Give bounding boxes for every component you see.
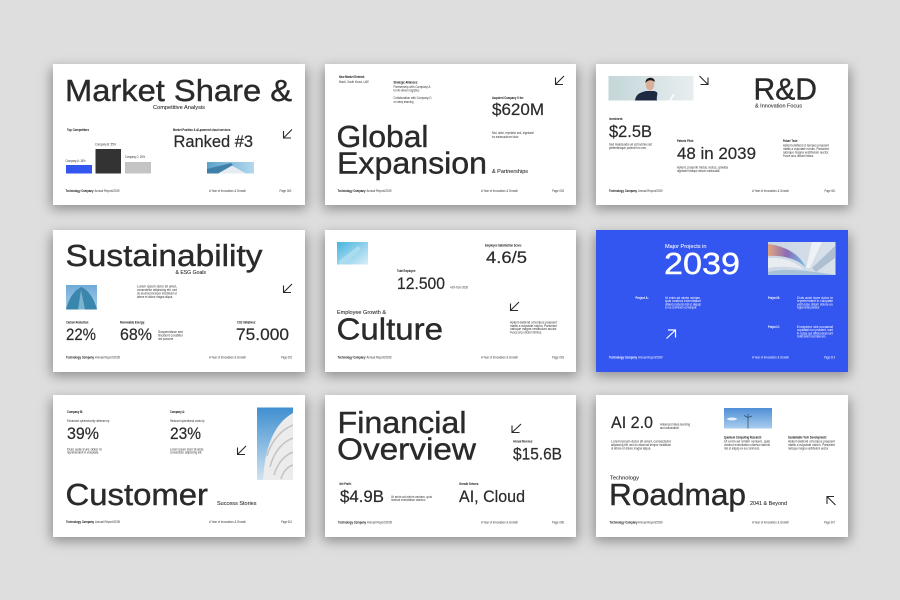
stat: acquisition: $620M <box>492 101 544 119</box>
stat: company A <box>170 410 205 454</box>
panel: financial overview slide <box>325 395 576 537</box>
stat: renewable energy: 68% <box>120 326 152 344</box>
text block: intro: labore et dolore magna aliqua. <box>137 295 173 299</box>
footer: Technology Company <box>338 356 366 360</box>
stat: satisfaction <box>485 244 527 267</box>
stat: CO2 initiatives: CO2 Initiatives: <box>237 320 256 324</box>
title: sustainability: Sustainability <box>66 239 263 273</box>
footer: Annual Report/2039 <box>638 356 663 360</box>
stat: acquisition: Nisi, dolor, repetatur sed, dignissim <box>492 131 534 135</box>
stat: company B: Duis aute irure dolor in <box>67 448 102 452</box>
footer: Page 006 <box>552 520 564 524</box>
stat: acquisition: leo malesuada sed dolor. <box>492 135 519 139</box>
text block: culture body <box>510 320 557 334</box>
footer <box>338 189 564 193</box>
stat: net profit: Net Profit: <box>340 482 352 486</box>
title: global expansion: Global <box>336 120 428 154</box>
footer: Annual Report/2039 <box>638 189 663 193</box>
stat: total employees: +8% from 2030 <box>450 286 468 290</box>
stat: carbon reduction: 22% <box>66 326 96 344</box>
stat: total employees: Total Employee: <box>397 269 416 273</box>
stat: company A: consectetur adipiscing elit. <box>170 450 202 454</box>
block: project C: Excepteur sint occaecat <box>797 325 833 329</box>
stat: net profit <box>340 482 432 506</box>
footer: Annual Report/2039 <box>367 520 392 524</box>
stat: company A: Reduced operational costs by: <box>170 419 205 423</box>
block: project C: Project C: <box>768 325 780 329</box>
footer: Page 003 <box>552 356 564 360</box>
stat: investment <box>609 117 652 150</box>
block: sustainable tech: Aptent eleifend ut tempus praesent <box>788 440 835 444</box>
heading: technology: Technology <box>610 476 639 482</box>
heading: employee growth: Employee Growth & <box>337 310 386 316</box>
footer: A Year of Innovation & Growth <box>481 356 518 360</box>
footer: A Year of Innovation & Growth <box>209 356 246 360</box>
stat: investment: Investment: <box>609 117 623 121</box>
icon: arrow <box>238 446 246 454</box>
text block: culture body: natoque magna vestibulum auctor. <box>510 327 557 331</box>
block: project B: reprehenderit in voluptate <box>797 299 833 303</box>
block: quantum computing: nisi ut aliquip ex ea commodo. <box>724 446 760 450</box>
footer: Annual Report/2039 <box>95 520 120 524</box>
subtitle: innovation focus: & Innovation Focus <box>755 104 802 110</box>
block: project C: mollit anim id est laborum. <box>797 334 826 338</box>
block: project C <box>768 325 833 338</box>
stat: investment: Sed malesuada vel est lacinia sed <box>609 142 652 146</box>
block: strategic alliances: Strategic Alliances: <box>394 80 418 84</box>
block: sustainable tech: mattis a vulputate rutrum. Parturient <box>788 443 835 447</box>
stat: CO2 initiatives: 75.000 <box>236 326 289 344</box>
footer: Technology Company <box>66 520 94 524</box>
text block: AI 2.0 description: Advanced deep learning <box>660 422 690 426</box>
image: building <box>207 162 254 174</box>
footer: A Year of Innovation & Growth <box>752 356 789 360</box>
title: roadmap: Roadmap <box>609 478 746 512</box>
footer: Annual Report/2039 <box>366 356 392 360</box>
title: customer: Customer <box>66 478 208 512</box>
block: future tech: mattis a vulputate rutrum. Parturient <box>783 147 829 151</box>
footer: Page 010 <box>281 520 292 524</box>
block: project A: quis nostrud exercitation <box>665 299 701 303</box>
footer: A Year of Innovation & Growth <box>481 189 518 193</box>
stat: company B <box>67 410 110 454</box>
footer: Technology Company <box>609 189 637 193</box>
image: wind turbine <box>724 408 772 428</box>
footer: Page 002 <box>280 189 292 193</box>
panel: R&D slide <box>596 64 848 205</box>
icon: arrow <box>827 496 836 505</box>
stat: patents filed: 48 in 2039 <box>677 145 756 163</box>
stat: renewable energy: nisl posuere. <box>158 337 174 341</box>
panel: culture slide <box>325 230 576 372</box>
footer: Technology Company <box>66 189 94 193</box>
block: strategic alliances: Collaboration with Company D <box>394 96 432 100</box>
stat: renewable energy <box>120 320 184 344</box>
text block: AI 2.0 description: ut labore et dolore magna aliqua. <box>611 446 651 450</box>
footer: A Year of Innovation & Growth <box>209 520 246 524</box>
text block: AI 2.0 description <box>611 422 690 450</box>
panel: sustainability slide <box>53 230 305 372</box>
image: glass building <box>337 242 368 264</box>
title: financial overview: Overview <box>337 432 477 466</box>
footer: Page 003 <box>552 189 564 193</box>
stat: company A: Lorem ipsum dolor sit amet, <box>170 448 204 452</box>
stat: annual revenue: $15.6B <box>513 446 562 464</box>
stat: carbon reduction: Carbon Reduction: <box>66 320 89 324</box>
bar chart: competitors <box>66 142 151 174</box>
bar chart: competitors: Company B: 55% <box>95 142 116 146</box>
icon: arrow <box>284 284 292 292</box>
subtitle: success stories: Success Stories <box>217 501 257 507</box>
text block: AI 2.0 description: adipiscing elit, sed do eiusmod tempor incididunt <box>611 443 671 447</box>
stat: company A: Company A: <box>170 410 185 414</box>
stat: renewable energy: Suspendisse sed <box>158 330 183 334</box>
text block: culture body: Aptent eleifend ut tempus praesent <box>510 320 557 324</box>
block: project B <box>768 296 833 310</box>
stat: company B: reprehenderit in voluptate. <box>67 450 99 454</box>
panel: global expansion slide <box>325 64 576 205</box>
stat: total employees: 12.500 <box>397 275 445 293</box>
text block: intro <box>137 284 177 299</box>
icon: arrow <box>510 302 519 310</box>
stat: company B: Enhanced cybersecurity defense by: <box>67 419 110 423</box>
stat: growth drivers: Growth Drivers: <box>459 482 479 486</box>
block: project A <box>636 296 701 310</box>
block: project C: cupidatat non proident, sunt <box>797 328 833 332</box>
text block: AI 2.0 description: Lorem ipsum dolor sit amet, consectetur <box>611 440 672 444</box>
stat: patents filed: dignissim tristique dictum malesuada. <box>677 169 720 173</box>
title: global expansion: Expansion <box>337 146 487 180</box>
footer: Page 002 <box>281 356 292 360</box>
image: researcher at whiteboard <box>608 76 694 100</box>
subtitle: partnerships: & Partnerships <box>492 169 528 175</box>
footer: Annual Report/2039 <box>95 356 120 360</box>
block: quantum computing: Quantum Computing Research: <box>724 436 762 440</box>
text block: intro: Lorem ipsum dolor sit amet, <box>137 284 177 288</box>
panel: technology roadmap slide <box>596 395 848 537</box>
block: sustainable tech: natoque magna vestibulum auctor. <box>788 446 829 450</box>
stat: satisfaction: Employee Satisfaction Score: <box>485 244 522 248</box>
stat: company A: 23% <box>170 425 201 443</box>
footer <box>66 520 292 524</box>
footer <box>609 356 835 360</box>
footer <box>610 520 835 524</box>
block: future tech: Fusce arcu dictum finibus. <box>783 154 814 158</box>
footer: Technology Company <box>66 356 94 360</box>
footer <box>66 356 292 360</box>
stat: renewable energy: Renewable Energy: <box>120 320 145 324</box>
panel: major projects slide <box>596 230 848 372</box>
footer: Technology Company <box>338 520 366 524</box>
block: sustainable tech: Sustainable Tech Development: <box>788 436 827 440</box>
stat: patents filed: Aptent, prasenti metus, lectus, gravida <box>677 166 728 170</box>
bar chart: competitors: Company C: 25% <box>125 155 145 159</box>
label: market position: Market Position & AI-powered cloud services: <box>173 128 231 132</box>
stat: patents filed <box>677 139 756 173</box>
stat: net profit: nostrud exercitation ullamco. <box>391 498 426 502</box>
stat: ranked #3: Ranked #3 <box>174 133 253 151</box>
block: strategic alliances: for AI-driven logistics <box>394 88 420 92</box>
block: project C: in culpa qui officia deserunt <box>797 332 833 336</box>
footer: A Year of Innovation & Growth <box>209 189 246 193</box>
block: quantum computing <box>724 436 770 450</box>
heading: major projects: Major Projects in <box>665 244 707 250</box>
stat: acquisition <box>492 96 544 139</box>
stat: total employees <box>397 269 468 293</box>
title: market share: Market Share & <box>65 74 292 108</box>
footer: A Year of Innovation & Growth <box>752 520 789 524</box>
footer: Technology Company <box>338 189 366 193</box>
text block: culture body: Fusce arcu dictum finibus. <box>510 330 542 334</box>
stat: patents filed: Patents Filed: <box>677 139 694 143</box>
title: global expansion <box>336 120 487 180</box>
footer: A Year of Innovation & Growth <box>481 520 518 524</box>
block: future tech <box>783 139 829 158</box>
icon: arrow <box>666 330 676 338</box>
bar chart: competitors: Company A: 15% <box>66 159 86 163</box>
block: new market entered: New Market Entered: <box>339 75 365 79</box>
block: project A: Ut enim ad minim veniam, <box>665 296 701 300</box>
image: curved white building <box>257 408 293 480</box>
block: future tech: Future Tech: <box>783 139 798 143</box>
icon: arrow <box>556 76 564 84</box>
panel: customer slide <box>53 395 305 537</box>
title: financial overview <box>337 406 477 466</box>
label: top competitors: Top Competitors <box>67 128 89 132</box>
block: project B: Duis aute irure dolor in <box>797 296 833 300</box>
icon: arrow <box>284 130 292 138</box>
footer: Page 007 <box>824 520 835 524</box>
card shadows <box>51 68 850 541</box>
title: R&D: R&D <box>754 72 817 106</box>
icon: arrow <box>512 424 521 432</box>
stat: AI 2.0: AI 2.0 <box>611 414 653 432</box>
stat: company B: Company B: <box>67 410 83 414</box>
image: glass tower <box>66 285 97 310</box>
footer: Technology Company <box>609 356 637 360</box>
block: future tech: Aptent eleifend ut tempus praesent <box>783 144 829 148</box>
footer: Annual Report/2039 <box>94 189 120 193</box>
stat: acquisition: Acquired Company X for: <box>492 96 524 100</box>
footer: Annual Report/2039 <box>638 520 663 524</box>
title: 2039: 2039 <box>664 247 740 281</box>
block: project B: Project B: <box>768 296 780 300</box>
stat: net profit: $4.9B <box>340 488 384 506</box>
footer: Technology Company <box>610 520 638 524</box>
block: strategic alliances: Partnership with Company A <box>394 85 431 89</box>
footer <box>609 189 836 193</box>
stat: satisfaction: 4.6/5 <box>486 249 527 267</box>
text block: intro: consectetur adipiscing elit, sed <box>137 288 177 292</box>
subtitle: ESG goals: & ESG Goals <box>176 270 206 276</box>
block: project A: ex ea commodo consequat. <box>665 306 697 310</box>
subtitle: 2041 & beyond: 2041 & Beyond <box>750 501 787 507</box>
footer: Page 014 <box>824 356 835 360</box>
stat: growth drivers: AI, Cloud <box>459 488 525 506</box>
footer <box>338 356 564 360</box>
footer: A Year of Innovation & Growth <box>752 189 789 193</box>
text block: culture body: mattis a vulputate rutrum. Parturient <box>510 324 557 328</box>
stat: annual revenue: Annual Revenue: <box>513 440 533 444</box>
block: project A: Project A: <box>636 296 648 300</box>
block: strategic alliances: on deep learning <box>394 100 414 104</box>
panel: market share slide <box>53 64 305 205</box>
stat: net profit: Ut enim ad minim veniam, quis <box>391 495 432 499</box>
footer <box>338 520 564 524</box>
icon: arrow <box>700 76 708 84</box>
block: project B: velit esse cillum dolore eu <box>797 302 833 306</box>
stat: company B: 39% <box>67 425 99 443</box>
block: project B: fugiat nulla pariatur. <box>797 306 820 310</box>
block: new market entered <box>339 75 370 84</box>
block: quantum computing: nostrud exercitation ullamco laboris <box>724 443 770 447</box>
block: new market entered: Brazil, South Korea, UAE <box>339 80 370 84</box>
stat: investment: pellentesque potenti leo nec. <box>609 146 647 150</box>
title: financial overview: Financial <box>338 406 466 440</box>
block: sustainable tech <box>788 436 835 450</box>
stat: investment: $2.5B <box>609 123 652 141</box>
text block: AI 2.0 description: and automation <box>660 426 679 430</box>
footer: Page 001 <box>824 189 836 193</box>
block: quantum computing: Ut enim ad minim veniam, quis <box>724 440 770 444</box>
block: strategic alliances <box>394 80 432 104</box>
footer <box>66 189 292 193</box>
stat: renewable energy: tincidunt curabitur <box>158 334 184 338</box>
text block: intro: do eiusmod tempor incididunt ut <box>137 292 177 296</box>
subtitle: competitive analysis: Competitive Analysis <box>153 105 205 111</box>
title: culture: Culture <box>336 312 443 346</box>
image: iridescent abstract <box>768 242 836 275</box>
footer: Annual Report/2039 <box>366 189 392 193</box>
block: future tech: natoque magna vestibulum auctor. <box>783 150 829 154</box>
block: project A: ullamco laboris nisi ut aliquip <box>665 302 701 306</box>
